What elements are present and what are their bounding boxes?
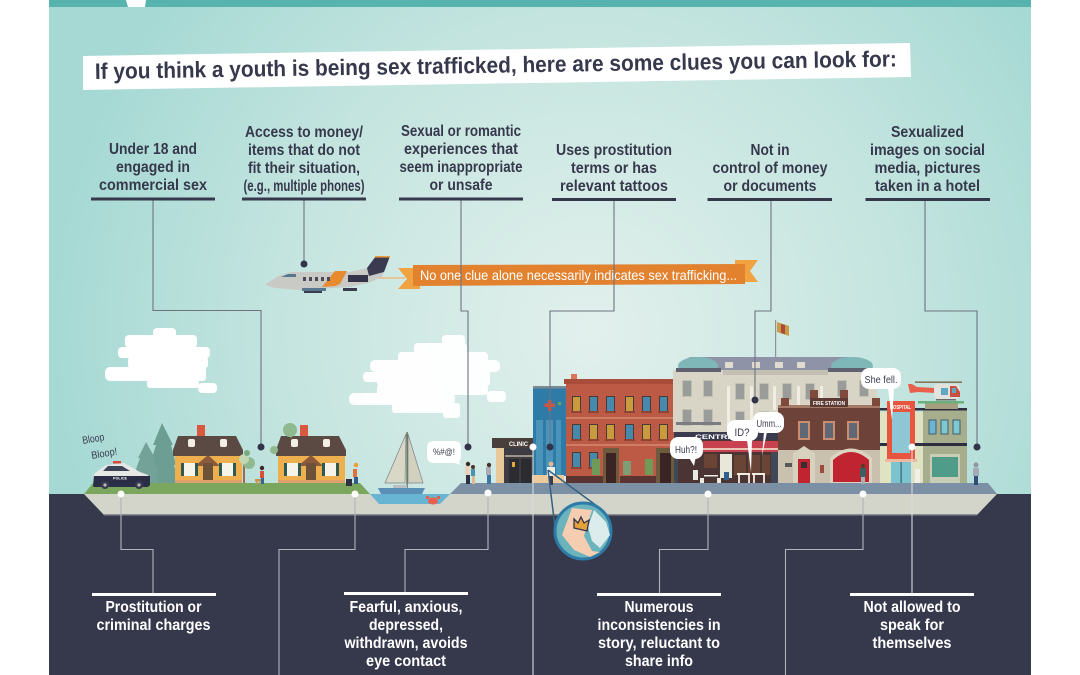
clue: prostitution terms: relevant tattoos	[560, 178, 668, 195]
clue: sexualized images: Sexualized	[891, 124, 964, 141]
clue: sexualized images: images on social	[870, 142, 985, 159]
house right	[276, 425, 346, 483]
banner: no one clue alone	[377, 260, 758, 289]
speech bubble: ID	[727, 420, 758, 472]
cafe storefront	[674, 432, 781, 483]
clue: access to money: fit their situation,	[248, 160, 360, 177]
clue: under 18: Under 18 and	[109, 141, 197, 158]
title strip: If you think a youth is being sex trafficked, here are some clues you can look for:	[95, 46, 897, 84]
speech bubble: ID: ID?	[734, 427, 750, 439]
hooded pedestrian	[973, 462, 979, 485]
pine trees	[134, 423, 178, 483]
speech bubble: swearing	[427, 441, 461, 465]
cloud: left	[105, 328, 217, 393]
brick apartment building	[564, 374, 677, 483]
clue: under 18: commercial sex	[99, 177, 207, 194]
speech bubble: Umm	[753, 412, 784, 456]
private jet	[265, 256, 390, 293]
clue: inconsistencies	[597, 593, 721, 670]
fire station	[778, 390, 880, 483]
house left	[173, 425, 243, 483]
police car	[93, 461, 150, 489]
hospital	[880, 401, 967, 483]
clue: sexualized images	[866, 124, 990, 201]
sailboat	[378, 432, 425, 494]
clue: sexual or romantic experiences: or unsafe	[430, 177, 493, 194]
siren text	[81, 431, 118, 462]
clinic: CLINIC	[509, 441, 528, 448]
cloud: centre	[349, 335, 506, 418]
clue: sexual or romantic experiences: experiences that	[404, 141, 518, 158]
clue: inconsistencies: story, reluctant to	[598, 635, 720, 652]
connector lines: clues below	[121, 447, 912, 675]
crab	[426, 496, 440, 504]
clue: sexual or romantic experiences: seem inappropriate	[400, 159, 523, 176]
clue: prostitution charges: Prostitution or	[106, 599, 202, 616]
speech bubble: Huh: Huh?!	[675, 445, 697, 456]
siren text: Bloop!	[90, 446, 118, 462]
clue: not in control: control of money	[712, 160, 828, 177]
clue: sexual or romantic experiences: Sexual or romantic	[401, 123, 521, 140]
clue: prostitution terms	[552, 142, 676, 201]
clue: access to money: items that do not	[248, 142, 360, 159]
connector dots: clues below	[118, 444, 916, 498]
tree behind house right	[270, 423, 297, 454]
clue: not allowed to speak	[850, 593, 974, 652]
ground plate	[84, 494, 997, 516]
clue: prostitution charges	[92, 593, 216, 634]
clue: access to money: (e.g., multiple phones)	[244, 178, 364, 195]
medical tower	[532, 386, 566, 483]
clue: sexual or romantic experiences	[399, 123, 523, 200]
flag	[775, 320, 789, 357]
clue: fearful	[344, 592, 468, 670]
couple walking	[465, 462, 475, 484]
dark ground panel	[49, 494, 1031, 675]
pedestrian	[486, 463, 491, 484]
speech bubble: She fell: She fell.	[864, 375, 898, 386]
water	[370, 494, 450, 504]
clue: under 18	[91, 141, 215, 200]
clinic	[492, 438, 533, 483]
central historic building	[673, 357, 877, 432]
hospital: HOSPITAL	[890, 405, 911, 411]
cafe storefront: CENTRAL	[695, 434, 740, 441]
clue: fearful: eye contact	[366, 653, 446, 670]
magnified person	[547, 462, 555, 485]
speech bubble: Umm: Umm...	[756, 419, 782, 430]
clue: sexualized images: media, pictures	[874, 160, 980, 177]
sky background panel	[49, 0, 1031, 495]
banner: no one clue alone: No one clue alone necessarily indicates sex trafficking...	[420, 267, 737, 283]
yard tree left	[239, 450, 255, 483]
clue: not allowed to speak: speak for	[880, 617, 944, 634]
clue: under 18: engaged in	[116, 159, 190, 176]
speech bubble: Huh	[670, 437, 703, 466]
connector dots: clues above	[258, 260, 980, 450]
clue: prostitution terms: terms or has	[571, 160, 657, 177]
clue: inconsistencies: inconsistencies in	[598, 617, 720, 634]
top teal bar	[49, 0, 1031, 7]
clue: inconsistencies: share info	[625, 653, 693, 670]
clue: access to money	[242, 124, 366, 200]
tattoo magnifier	[548, 470, 611, 559]
clue: not in control	[708, 142, 832, 201]
clue: fearful: withdrawn, avoids	[344, 635, 468, 652]
clue: inconsistencies: Numerous	[624, 599, 694, 616]
clue: not in control: Not in	[750, 142, 790, 159]
connector lines: clues above	[153, 199, 977, 447]
clue: not in control: or documents	[724, 178, 816, 195]
clue: prostitution terms: Uses prostitution	[556, 142, 672, 159]
lawn	[84, 483, 370, 494]
clue: sexualized images: taken in a hotel	[875, 178, 980, 195]
street	[450, 483, 997, 494]
fire station: FIRE STATION	[813, 401, 845, 407]
siren text: Bloop	[81, 431, 105, 447]
clue: not allowed to speak: themselves	[872, 635, 952, 652]
police car: POLICE	[113, 476, 127, 480]
clue: not allowed to speak: Not allowed to	[864, 599, 960, 616]
firefighter figure	[860, 464, 866, 484]
clue: prostitution charges: criminal charges	[96, 617, 210, 634]
clue: fearful: Fearful, anxious,	[350, 599, 462, 616]
person with dog	[255, 466, 264, 484]
clue: access to money: Access to money/	[245, 124, 364, 141]
speech bubble: swearing: %#@!	[433, 447, 455, 457]
traveller with suitcase	[346, 463, 358, 486]
helicopter	[908, 382, 962, 400]
clue: fearful: depressed,	[369, 617, 443, 634]
speech bubble: She fell	[861, 368, 901, 420]
